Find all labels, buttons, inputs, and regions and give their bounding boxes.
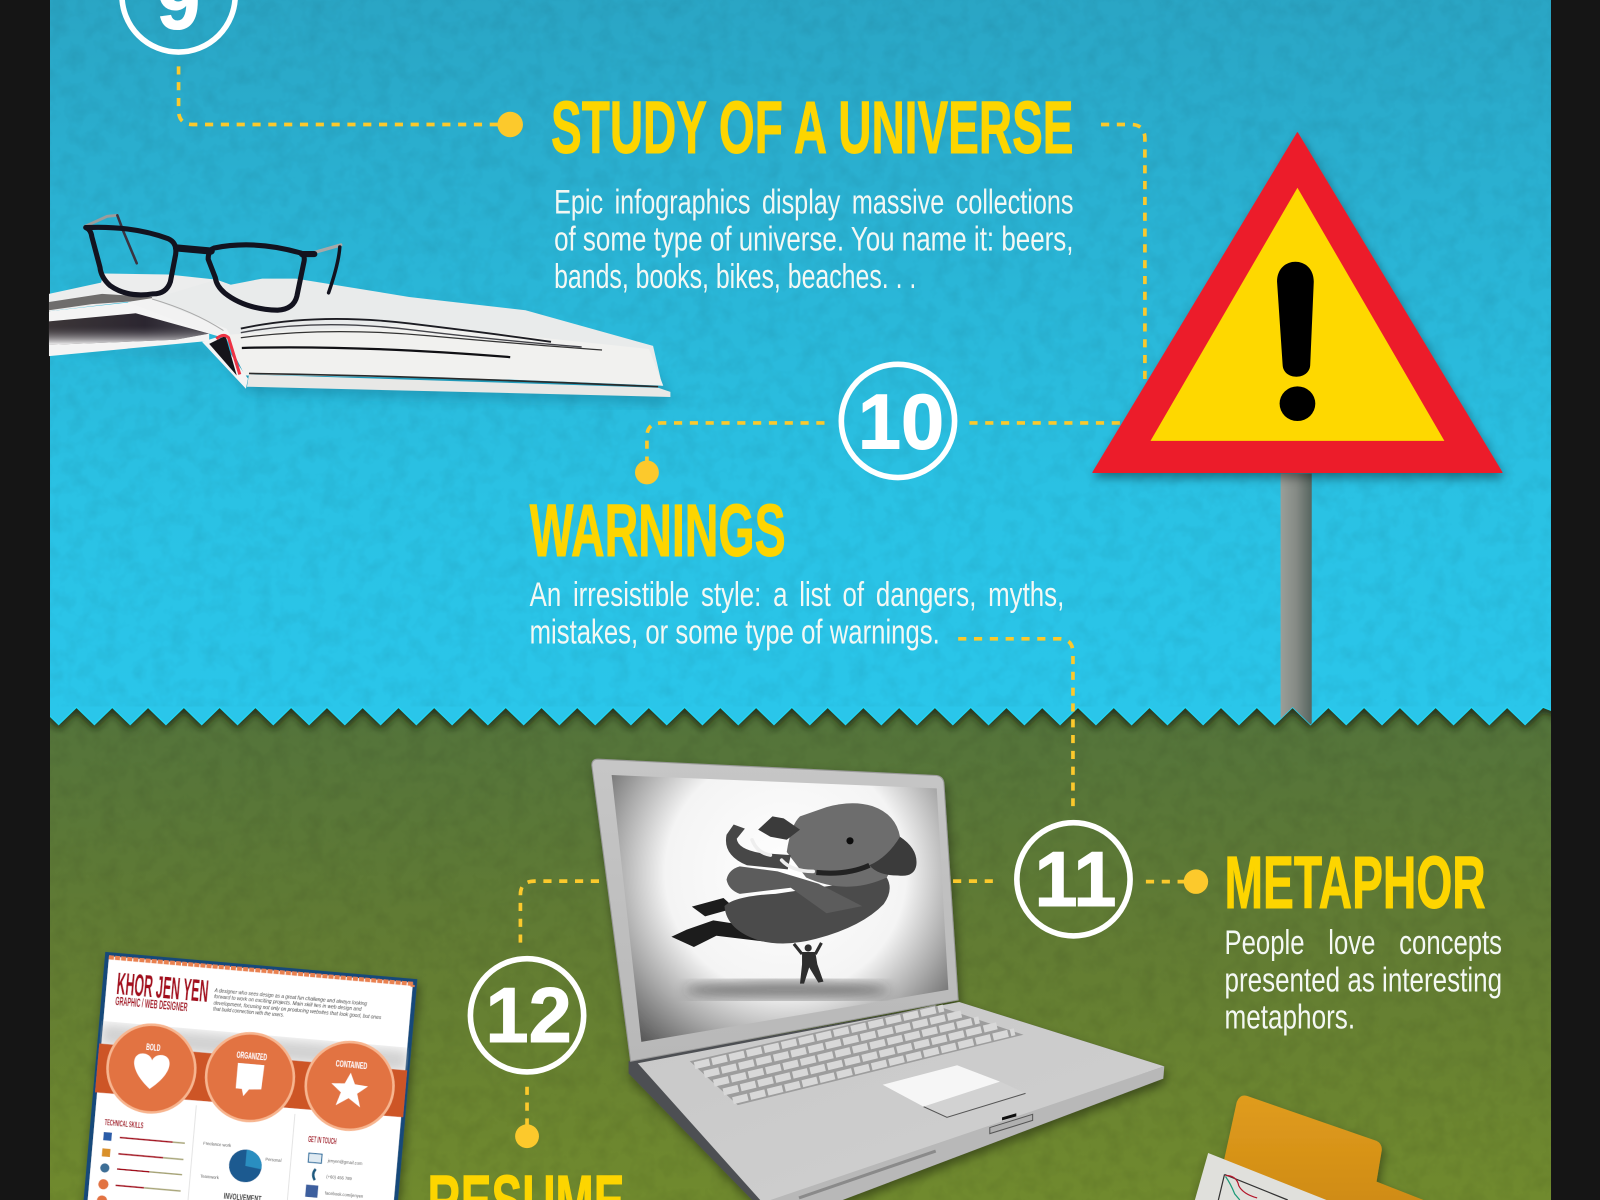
icon: folder with chart <box>1195 1096 1423 1200</box>
resume band shadow <box>99 1023 409 1073</box>
laptop front latch <box>799 1113 1033 1198</box>
text block: study of a universe: of some type of universe. You name it: beers, <box>554 221 1073 259</box>
resume circle: bold: BOLD <box>146 1042 161 1053</box>
elephant illustration <box>671 803 917 984</box>
step 12 number badge: 12 <box>485 973 572 1059</box>
book: spine and red ribbon <box>202 335 248 389</box>
step 9 number badge <box>122 0 235 52</box>
elephant raised foot <box>758 816 800 840</box>
text block: metaphor: People love concepts <box>1224 924 1502 962</box>
elephant ear <box>869 837 917 876</box>
heading: study of a universe: STUDY OF A UNIVERSE <box>551 86 1073 169</box>
text block: metaphor: metaphors. <box>1224 999 1355 1037</box>
resume paper <box>83 954 415 1200</box>
resume contact details: jenyen@gmail.com <box>327 1158 363 1166</box>
book: left cover and dark gap <box>49 302 209 356</box>
book: right pages <box>152 279 670 397</box>
resume circle: contained <box>302 1038 397 1133</box>
resume pie chart: Freelance work <box>203 1141 232 1148</box>
resume contact details <box>304 1136 363 1198</box>
resume contact details: (+60) 456 789 <box>326 1174 353 1181</box>
laptop keyboard <box>690 1005 1023 1105</box>
elephant head <box>787 803 900 887</box>
folder body <box>1220 1096 1423 1200</box>
text block: warnings: mistakes, or some type of warnings. <box>530 613 940 651</box>
resume name: GRAPHIC / WEB DESIGNER <box>115 994 188 1014</box>
heading: warnings: WARNINGS <box>530 489 786 572</box>
folder paper <box>1195 1153 1327 1200</box>
connector: laptop to 12 <box>520 881 599 943</box>
resume intro text: that build connection with the users. <box>213 1006 284 1019</box>
elephant eye and mouth <box>816 837 869 873</box>
resume circle: organized: ORGANIZED <box>236 1050 268 1062</box>
resume circle: contained: CONTAINED <box>335 1058 368 1071</box>
resume column dividers <box>185 1105 295 1200</box>
icon: resume document <box>83 954 415 1200</box>
elephant tusks <box>752 840 813 871</box>
folder chart lines <box>1218 1174 1288 1200</box>
texture: blue paper grain <box>50 0 1551 706</box>
book: crease fill between pages <box>128 298 251 376</box>
connector: 11 to metaphor <box>1146 869 1208 894</box>
resume scalloped top stripe <box>109 957 413 987</box>
book: left upper pages <box>49 273 231 329</box>
resume pie chart: Personal <box>265 1157 282 1163</box>
text block: study of a universe: bands, books, bikes, beaches. . . <box>554 258 916 296</box>
resume circle: bold <box>104 1021 199 1116</box>
elephant front leg <box>727 866 862 913</box>
icon: resume document: KHOR JEN YEN <box>115 965 210 1009</box>
resume pie chart: Teamwork <box>200 1173 220 1180</box>
man lifting elephant <box>794 943 823 984</box>
resume contact details: facebook.com/jenyen <box>325 1190 364 1199</box>
resume intro text <box>213 988 382 1020</box>
resume name <box>115 972 209 1012</box>
panel: blue upper section with zigzag edge <box>41 0 1561 724</box>
laptop base <box>629 1002 1164 1200</box>
step 10 number badge: 10 <box>858 379 944 465</box>
resume technical skills <box>96 1118 186 1200</box>
text block: warnings: An irresistible style: a list of dangers, myths, <box>530 576 1064 614</box>
resume technical skills: TECHNICAL SKILLS <box>104 1118 144 1130</box>
panel: green lower section <box>50 694 1551 1200</box>
connector: 10 to warnings <box>635 423 824 484</box>
resume intro text: A designer who sees design as a great fun challenge and always looking <box>213 988 367 1007</box>
resume intro text: forward to work on exciting projects. Main skill lies in web design and <box>214 994 362 1013</box>
connector: laptop to 11 <box>953 879 1000 883</box>
step 10 number badge <box>841 364 955 478</box>
icon: warning sign post <box>1281 473 1312 724</box>
connector: 12 to resume <box>515 1087 539 1148</box>
screen floor shadow <box>685 981 889 999</box>
icon: laptop with elephant <box>592 759 1164 1200</box>
elephant body <box>724 878 890 943</box>
resume circle: organized <box>202 1030 298 1125</box>
connector: universe to warning sign <box>1101 124 1145 380</box>
icon: warning triangle sign <box>1093 133 1502 472</box>
resume intro text: development, focusing not only on producing websites that look good, but ones <box>213 1000 382 1021</box>
text block: study of a universe: Epic infographics display massive collections <box>554 183 1073 221</box>
laptop trackpad <box>883 1065 1026 1117</box>
laptop screen <box>612 775 948 1042</box>
elephant back legs <box>692 898 735 916</box>
step 11 number badge: 11 <box>1035 837 1117 923</box>
step 12 number badge <box>470 959 584 1072</box>
step 11 number badge <box>1017 823 1130 936</box>
text block: study of a universe <box>554 183 1073 296</box>
text block: metaphor: presented as interesting <box>1224 961 1502 999</box>
resume pie chart <box>198 1141 283 1200</box>
laptop lid <box>592 759 958 1061</box>
connector: warnings to 11 <box>958 639 1073 806</box>
connector: 10 to warning sign <box>969 421 1120 425</box>
text block: metaphor <box>1224 924 1502 1037</box>
resume orange band <box>95 1044 407 1119</box>
icon: book with glasses <box>49 215 670 404</box>
glasses <box>85 215 341 310</box>
book: soft shadow <box>49 347 670 404</box>
elephant trunk <box>726 824 791 869</box>
resume contact details: GET IN TOUCH <box>308 1135 337 1146</box>
connector: 9 to study of a universe <box>179 66 523 137</box>
text block: warnings <box>530 576 1064 651</box>
